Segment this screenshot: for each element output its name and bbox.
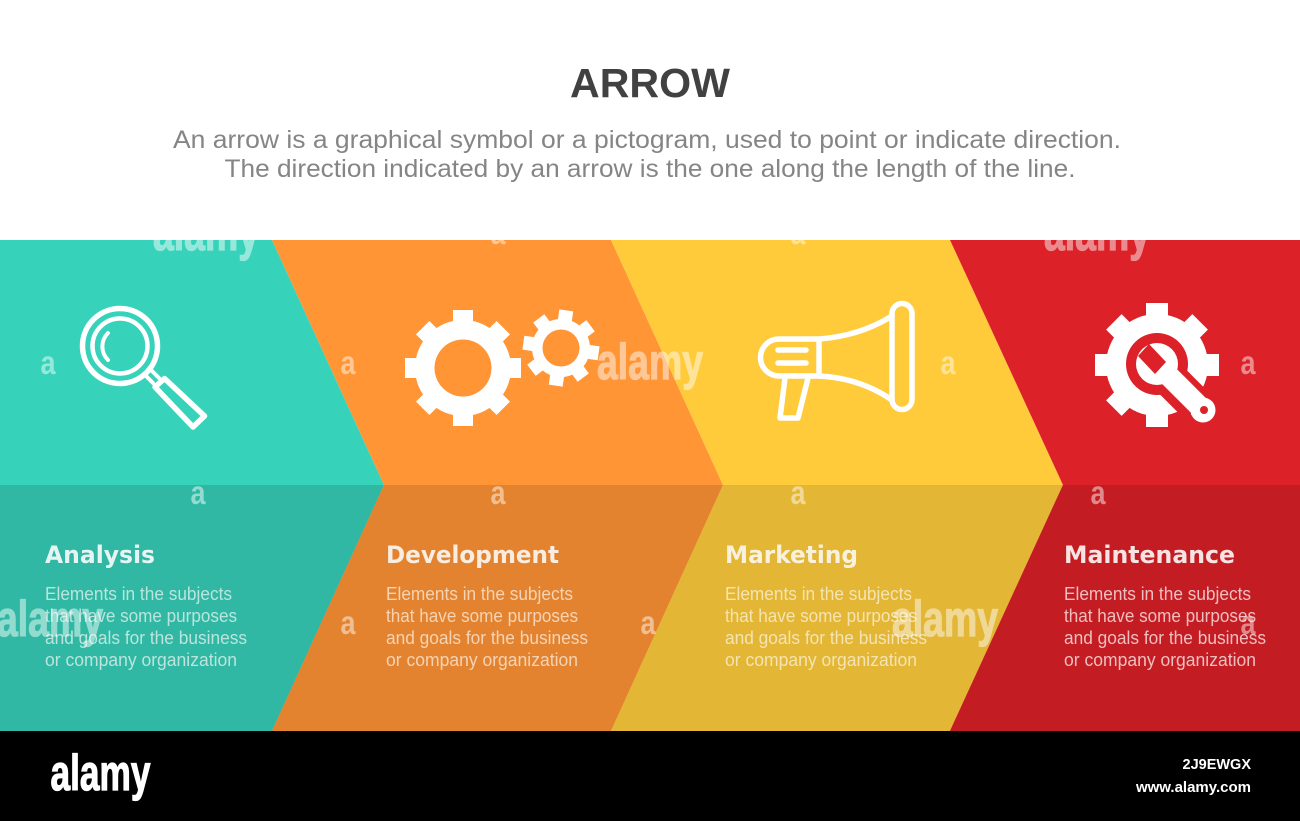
text block: marketing: that have some purposes xyxy=(725,606,917,626)
icon: magnifying glass xyxy=(82,308,204,427)
text block: analysis: and goals for the business xyxy=(45,628,247,648)
watermarks: a xyxy=(340,604,356,641)
text block: maintenance: and goals for the business xyxy=(1064,628,1266,648)
watermarks: alamy xyxy=(597,334,703,390)
watermarks: a xyxy=(340,344,356,381)
text block: maintenance xyxy=(1064,541,1266,670)
text block: development: and goals for the business xyxy=(386,628,588,648)
icon: gear with wrench xyxy=(1095,303,1219,427)
footer image id: 2J9EWGX xyxy=(1182,757,1251,773)
text block: analysis xyxy=(45,541,247,670)
watermarks: a xyxy=(490,214,506,251)
watermarks: alamy xyxy=(0,591,103,647)
watermarks: alamy xyxy=(892,591,998,647)
watermarks: a xyxy=(1240,604,1256,641)
panel: maintenance arrow xyxy=(950,240,1300,731)
watermarks: a xyxy=(1240,344,1256,381)
text block: marketing: and goals for the business xyxy=(725,628,927,648)
footer bar xyxy=(0,731,1300,821)
watermarks: a xyxy=(40,344,56,381)
panel: marketing arrow xyxy=(611,240,1063,731)
watermarks: a xyxy=(790,474,806,511)
icon: gears xyxy=(405,305,604,426)
watermarks: alamy xyxy=(1044,205,1150,261)
text block: analysis: Elements in the subjects xyxy=(45,584,232,604)
text block: development: or company organization xyxy=(386,650,578,670)
text block: maintenance: Maintenance xyxy=(1064,541,1235,569)
text block: development xyxy=(386,541,588,670)
panel: development arrow xyxy=(272,240,723,731)
watermarks: alamy xyxy=(153,205,259,261)
text block: analysis: Analysis xyxy=(45,541,155,569)
title: ARROW xyxy=(570,60,730,106)
watermarks: a xyxy=(640,604,656,641)
text block: marketing xyxy=(725,541,927,670)
text block: marketing: Elements in the subjects xyxy=(725,584,912,604)
watermarks: a xyxy=(190,474,206,511)
text block: marketing: or company organization xyxy=(725,650,917,670)
icon: megaphone xyxy=(760,304,912,418)
subtitle text xyxy=(173,126,1121,183)
text block: analysis: that have some purposes xyxy=(45,606,237,626)
text block: development: that have some purposes xyxy=(386,606,578,626)
watermarks: a xyxy=(940,344,956,381)
text block: maintenance: or company organization xyxy=(1064,650,1256,670)
text block: analysis: or company organization xyxy=(45,650,237,670)
footer logo: alamy xyxy=(50,745,151,801)
watermarks: a xyxy=(490,474,506,511)
text block: marketing: Marketing xyxy=(725,541,858,569)
watermarks: a xyxy=(1090,474,1106,511)
subtitle text: An arrow is a graphical symbol or a pictogram, used to point or indicate direction. xyxy=(173,126,1121,154)
watermarks xyxy=(0,205,1256,647)
text block: development: Development xyxy=(386,541,559,569)
text block: maintenance: that have some purposes xyxy=(1064,606,1256,626)
text block: development: Elements in the subjects xyxy=(386,584,573,604)
subtitle text: The direction indicated by an arrow is the one along the length of the line. xyxy=(224,155,1076,183)
footer image id: www.alamy.com xyxy=(1135,779,1251,796)
panel: analysis arrow xyxy=(0,240,384,731)
text block: maintenance: Elements in the subjects xyxy=(1064,584,1251,604)
footer image id xyxy=(1135,757,1251,796)
watermarks: a xyxy=(790,214,806,251)
